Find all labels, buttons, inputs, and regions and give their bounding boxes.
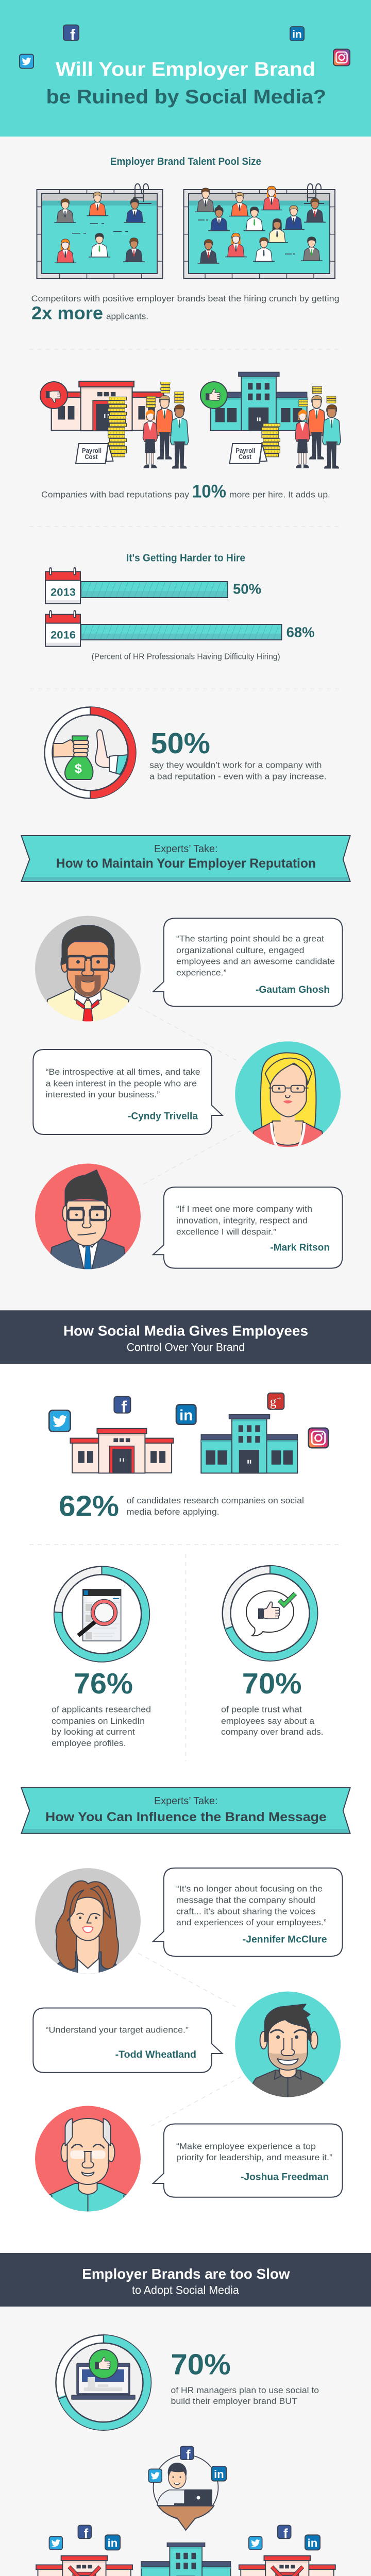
sign: payroll cost: Cost — [85, 453, 98, 461]
stat: 70 percent: 70% — [242, 1667, 302, 1700]
chart: 76 percent donut — [54, 1566, 149, 1662]
illustration: social media manager pin — [148, 2446, 226, 2530]
text: bad reputations pay more: 10% — [192, 481, 226, 502]
stat: 62 percent: 62% — [59, 1490, 119, 1523]
callout: Gautam Ghosh quote: “The starting point should be a great — [176, 935, 324, 944]
stat: 70 percent HR managers: of HR managers plan to use social to — [171, 2386, 319, 2395]
sign: payroll cost — [230, 444, 267, 464]
icon: linkedin — [290, 27, 304, 41]
stat: 70 percent: employees say about a — [221, 1717, 315, 1726]
page background: top section — [0, 137, 371, 1311]
callout: Jennifer McClure quote: -Jennifer McClure — [243, 1935, 327, 1945]
stat: 76 percent: 76% — [74, 1667, 133, 1700]
panel: social media heading band: How Social Media Gives Employees — [63, 1323, 308, 1338]
text: bad reputations pay more: more per hire. It adds up. — [229, 490, 330, 500]
text: competitors: Competitors with positive employer brands beat the hiring crunch by getting — [31, 294, 340, 303]
ribbon: maintain your reputation: How to Maintain Your Employer Reputation — [56, 856, 316, 871]
stat: 70 percent: company over brand ads. — [221, 1727, 324, 1737]
callout: Jennifer McClure quote — [153, 1868, 342, 1956]
icon: thumbs up — [200, 382, 227, 409]
callout: Todd Wheatland quote — [33, 2008, 223, 2073]
text: competitors: 2x more — [31, 303, 103, 323]
ribbon: influence the brand message: Experts’ Take: — [154, 1795, 217, 1807]
illustration: rejected company left — [36, 2525, 132, 2576]
stat: 70 percent HR managers: build their employer brand BUT — [171, 2397, 297, 2406]
callout: Jennifer McClure quote: message that the company should — [176, 1896, 315, 1905]
ribbon: influence the brand message: How You Can Influence the Brand Message — [45, 1810, 327, 1824]
bar: 2016 — [45, 612, 315, 647]
icon: twitter — [20, 54, 33, 69]
callout: Gautam Ghosh quote — [153, 918, 342, 1006]
callout: Todd Wheatland quote: “Understand your target audience.” — [46, 2026, 189, 2035]
callout: Gautam Ghosh quote: experience.” — [176, 968, 227, 977]
heading: harder to hire: It's Getting Harder to Hire — [126, 552, 245, 564]
stat: 76 percent — [52, 1667, 151, 1748]
icon: trust thumbs up speech bubble — [246, 1591, 295, 1636]
illustration: rejected company right — [239, 2525, 335, 2576]
icon: hand with money bag — [53, 736, 93, 779]
text: competitors: applicants. — [106, 312, 148, 321]
sign: payroll cost: Payroll — [82, 447, 102, 454]
stat: 62 percent — [59, 1490, 304, 1523]
stat: 76 percent: by looking at current — [52, 1727, 135, 1737]
panel: slow to adopt heading band: to Adopt Social Media — [132, 2283, 240, 2297]
panel: social media heading band: Control Over Your Brand — [127, 1341, 245, 1353]
caption: (Percent of HR Professionals Having Difficulty Hiring) — [92, 653, 280, 662]
bar: 2016: 68% — [286, 624, 315, 640]
callout: Mark Ritson quote — [153, 1187, 342, 1268]
illustration: bad reputation company — [40, 381, 189, 469]
page background: white section — [0, 1364, 371, 2253]
panel: slow to adopt heading band — [0, 2253, 371, 2307]
panel: slow to adopt heading band: Employer Brands are too Slow — [82, 2266, 290, 2282]
avatar: Gautam Ghosh — [35, 916, 141, 1025]
stat: 50 percent: 50% — [150, 727, 210, 760]
icon: laptop with like badge — [72, 2349, 135, 2399]
panel: social media heading band — [0, 1310, 371, 1364]
panel: header — [0, 0, 371, 137]
figure: employees with pay — [143, 382, 189, 469]
chart: large talent pool — [183, 184, 335, 279]
callout: Cyndy Trivella quote — [33, 1049, 223, 1134]
callout: Joshua Freedman quote: priority for leadership, and measure it.” — [176, 2153, 332, 2162]
avatar: Jennifer McClure — [35, 1868, 141, 1977]
heading: talent pool: Employer Brand Talent Pool Size — [110, 156, 261, 167]
chart: tall coin stack — [108, 397, 126, 457]
illustration: companies surrounded by social icons — [49, 1393, 328, 1473]
chart: 70 percent HR managers donut — [56, 2335, 151, 2430]
text: bad reputations pay more — [41, 481, 330, 502]
callout: Mark Ritson quote: innovation, integrity, respect and — [176, 1216, 308, 1225]
avatar: Joshua Freedman — [35, 2106, 141, 2215]
callout: Mark Ritson quote: excellence I will despair.” — [176, 1227, 276, 1236]
bar: 2016: 2016 — [50, 630, 76, 641]
stat: 62 percent: of candidates research companies on social — [127, 1496, 304, 1505]
callout: Cyndy Trivella quote: -Cyndy Trivella — [128, 1111, 198, 1122]
stat: 70 percent HR managers: 70% — [171, 2348, 231, 2381]
callout: Joshua Freedman quote: “Make employee experience a top — [176, 2142, 316, 2151]
stat: 76 percent: employee profiles. — [52, 1739, 126, 1748]
callout: Jennifer McClure quote: craft... it's about sharing the voices — [176, 1907, 315, 1916]
icon: facebook — [63, 25, 79, 43]
icon: LinkedIn profile under magnifier — [80, 1589, 121, 1641]
sign: payroll cost — [76, 444, 113, 464]
callout: Jennifer McClure quote: “It's no longer about focusing on the — [176, 1885, 323, 1894]
illustration: chosen company centre — [141, 2543, 231, 2576]
icon: refusing hand — [95, 730, 128, 774]
callout: Cyndy Trivella quote: a keen interest in the people who are — [46, 1079, 197, 1088]
callout: Joshua Freedman quote: -Joshua Freedman — [241, 2172, 329, 2183]
bar: 2013 — [45, 569, 261, 604]
callout: Gautam Ghosh quote: organizational culture, engaged — [176, 946, 304, 955]
callout: Gautam Ghosh quote: employees and an awesome candidate — [176, 957, 335, 967]
avatar: Cyndy Trivella — [235, 1041, 341, 1151]
sign: payroll cost: Cost — [239, 453, 252, 461]
chart: short coin stack — [262, 423, 280, 457]
stat: 62 percent: media before applying. — [127, 1507, 220, 1517]
avatar: Mark Ritson — [35, 1163, 141, 1273]
ribbon: maintain your reputation: Experts’ Take: — [154, 843, 217, 855]
icon: instagram — [333, 49, 350, 65]
icon: hand with money bag: $ — [75, 761, 82, 776]
stat: 50 percent — [149, 727, 327, 781]
page background: lower section — [0, 2307, 371, 2576]
callout: Gautam Ghosh quote: -Gautam Ghosh — [256, 985, 330, 995]
chart: 70 percent donut — [223, 1566, 317, 1661]
text: bad reputations pay more: Companies with bad reputations pay — [41, 490, 190, 500]
text: competitors — [31, 294, 340, 323]
stat: 70 percent HR managers — [171, 2348, 319, 2406]
callout: Todd Wheatland quote: -Todd Wheatland — [115, 2049, 196, 2060]
stat: 76 percent: of applicants researched — [52, 1705, 151, 1715]
callout: Mark Ritson quote: “If I meet one more company with — [176, 1205, 312, 1214]
callout: Joshua Freedman quote — [153, 2124, 342, 2197]
stat: 70 percent — [221, 1667, 324, 1737]
bar chart: difficulty hiring — [45, 569, 315, 662]
callout: Jennifer McClure quote: and experiences of your employees.” — [176, 1918, 327, 1927]
title: Will Your Employer Brand — [56, 59, 315, 80]
chart: 50 percent donut with money refusal icon — [44, 707, 136, 799]
ribbon: maintain your reputation — [21, 836, 350, 882]
ribbon: influence the brand message — [21, 1788, 350, 1834]
title: be Ruined by Social Media? — [46, 87, 326, 108]
sign: payroll cost: Payroll — [236, 447, 256, 454]
avatar: Todd Wheatland — [235, 1992, 341, 2101]
callout: Cyndy Trivella quote: “Be introspective at all times, and take — [46, 1067, 200, 1077]
bar: 2013: 2013 — [50, 586, 76, 598]
illustration: good reputation company — [200, 372, 341, 469]
chart: small talent pool — [37, 184, 163, 279]
title — [46, 59, 326, 108]
callout: Cyndy Trivella quote: interested in your business.” — [46, 1090, 160, 1099]
stat: 70 percent: of people trust what — [221, 1705, 302, 1715]
stat: 50 percent: say they wouldn’t work for a company with — [149, 760, 322, 770]
icon: thumbs down — [40, 382, 68, 409]
figure: employees with pay — [295, 386, 341, 469]
stat: 76 percent: companies on LinkedIn — [52, 1717, 145, 1726]
bar: 2013: 50% — [233, 581, 261, 597]
stat: 50 percent: a bad reputation - even with a pay increase. — [149, 772, 327, 781]
callout: Mark Ritson quote: -Mark Ritson — [270, 1243, 330, 1253]
